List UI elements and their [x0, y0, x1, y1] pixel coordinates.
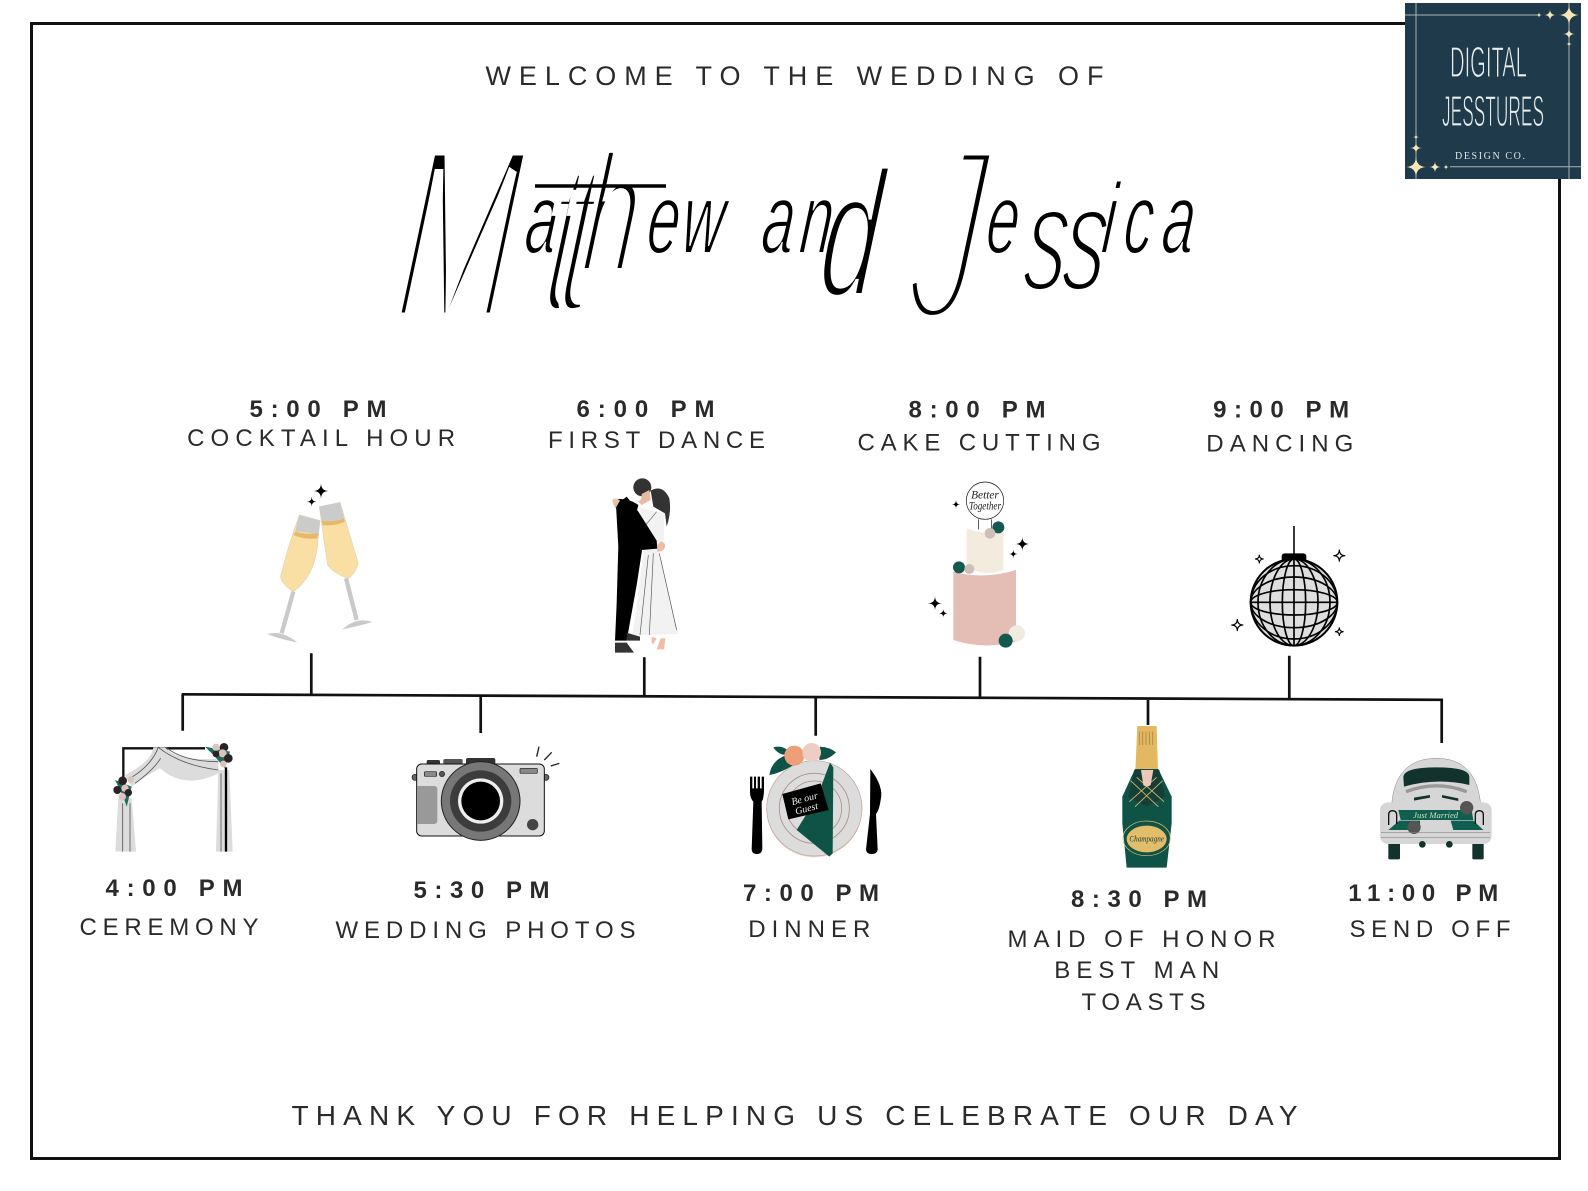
icon: dancing couple: [613, 478, 678, 653]
event: 4:00 PM ceremony: CEREMONY: [80, 914, 258, 941]
event: 9:00 PM dancing: DANCING: [1206, 430, 1353, 458]
icon: dinner place setting: Be our: [790, 790, 819, 808]
icon: camera: [412, 747, 559, 840]
event: 9:00 PM dancing: [1206, 396, 1353, 458]
event: 8:30 PM toasts: [1008, 886, 1276, 1016]
title: couple names in script: t: [550, 115, 614, 360]
title: couple names in script: i: [1098, 164, 1124, 275]
event: 8:30 PM toasts: MAID OF HONOR: [1008, 926, 1276, 953]
icon: just married car: [1380, 758, 1492, 859]
icon: dinner place setting: [750, 743, 881, 857]
title: couple names in script: h: [576, 118, 650, 309]
event: 5:30 PM wedding photos: WEDDING PHOTOS: [336, 917, 636, 944]
title: couple names in script: w: [678, 164, 734, 275]
icon: disco ball: [1231, 526, 1345, 646]
event: 11:00 PM send off: 11:00 PM: [1348, 880, 1498, 907]
event: 7:00 PM dinner: 7:00 PM: [743, 880, 879, 907]
event: 8:00 PM cake cutting: 8:00 PM: [908, 396, 1046, 424]
title: couple names in script: c: [1120, 164, 1160, 275]
title: couple names in script: J: [898, 95, 1001, 374]
title: couple names in script: [386, 95, 1208, 374]
event: 7:00 PM dinner: [743, 880, 879, 943]
title: couple names in script: a: [521, 164, 564, 275]
title: couple names in script: s: [1057, 156, 1117, 323]
icon: tiered wedding cake: Together: [969, 500, 1001, 512]
event: 6:00 PM first dance: 6:00 PM: [576, 396, 714, 423]
event: 8:30 PM toasts: TOASTS: [1082, 989, 1206, 1016]
event: 4:00 PM ceremony: [80, 875, 258, 941]
timeline connector lines: [182, 653, 1442, 743]
title: couple names in script: a: [1158, 164, 1201, 275]
footer thank-you line: THANK YOU FOR HELPING US CELEBRATE OUR DAY: [292, 1100, 1298, 1131]
title: couple names in script: n: [796, 164, 839, 275]
heading: welcome line: WELCOME TO THE WEDDING OF: [486, 61, 1104, 91]
event: 5:00 PM cocktail hour: [187, 396, 455, 452]
logo badge: Digital Jesstures: DESIGN CO.: [1455, 151, 1525, 162]
title: couple names in script: d: [812, 134, 894, 335]
icon: champagne glasses: [267, 483, 372, 642]
event: 6:00 PM first dance: FIRST DANCE: [548, 427, 765, 454]
icon: dinner place setting: Guest: [794, 801, 820, 818]
event: 11:00 PM send off: [1348, 880, 1510, 943]
icon: ceremony arch: [113, 743, 233, 852]
title: couple names in script: t: [535, 115, 599, 360]
icon: tiered wedding cake: [928, 482, 1030, 648]
event: 5:30 PM wedding photos: [336, 877, 636, 944]
title: couple names in script: a: [758, 164, 801, 275]
event: 8:00 PM cake cutting: CAKE CUTTING: [858, 430, 1100, 456]
event: 4:00 PM ceremony: 4:00 PM: [106, 875, 242, 902]
icon: tiered wedding cake: Better: [971, 489, 999, 501]
event: 7:00 PM dinner: DINNER: [748, 916, 870, 943]
title: couple names in script: M: [386, 95, 535, 374]
icon: champagne bottle: Champagne: [1129, 835, 1164, 844]
title: couple names in script: e: [982, 164, 1025, 275]
title: couple names in script: s: [1018, 156, 1078, 323]
event: 5:30 PM wedding photos: 5:30 PM: [414, 877, 550, 904]
event: 5:00 PM cocktail hour: 5:00 PM: [250, 396, 386, 423]
event: 8:30 PM toasts: 8:30 PM: [1071, 886, 1207, 913]
icon: champagne bottle: [1122, 726, 1172, 868]
event: 6:00 PM first dance: [548, 396, 765, 454]
logo badge: Digital Jesstures: [1405, 3, 1581, 179]
event: 8:30 PM toasts: BEST MAN: [1054, 957, 1219, 984]
event: 9:00 PM dancing: 9:00 PM: [1213, 396, 1349, 424]
event: 11:00 PM send off: SEND OFF: [1350, 916, 1510, 943]
icon: just married car: Just Married: [1413, 811, 1459, 820]
event: 8:00 PM cake cutting: [858, 396, 1100, 456]
title: couple names in script: e: [643, 164, 686, 275]
event: 5:00 PM cocktail hour: COCKTAIL HOUR: [187, 425, 455, 452]
